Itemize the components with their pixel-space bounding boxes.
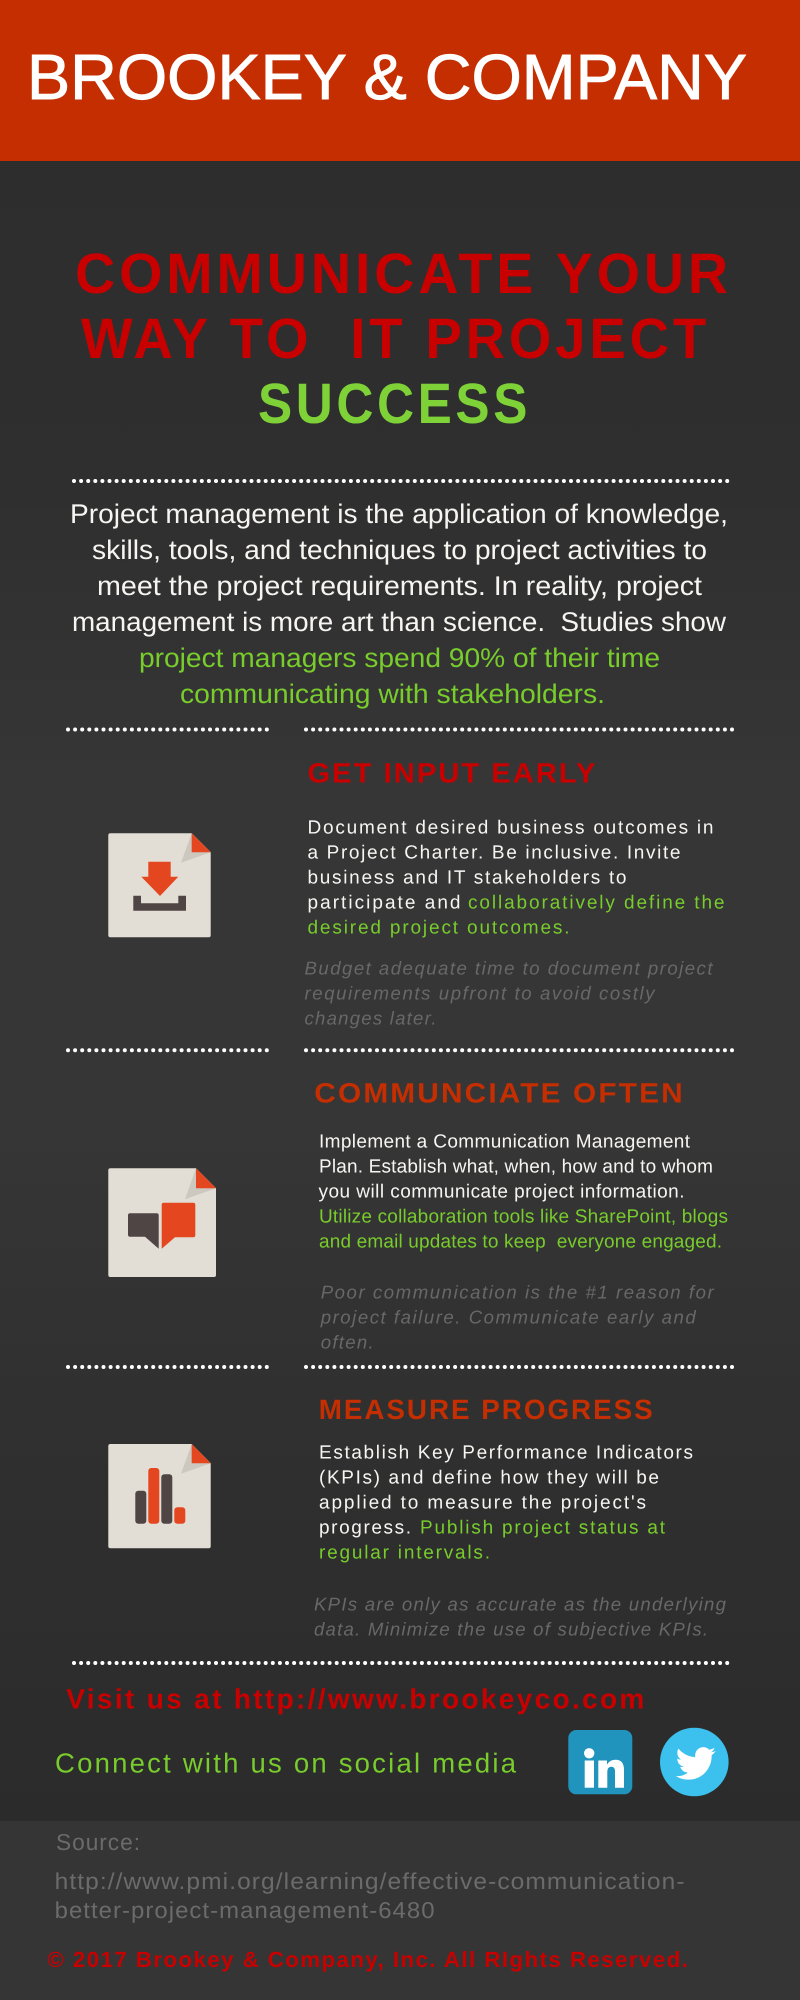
body text: Publish project status at bbox=[420, 1517, 666, 1538]
body text: and email updates to keep everyone engaged. bbox=[319, 1231, 722, 1252]
source url: http://www.pmi.org/learning/effective-communication- bbox=[55, 1868, 686, 1894]
body text: business and IT stakeholders to bbox=[308, 867, 626, 888]
heading: COMMUNCIATE OFTEN bbox=[314, 1078, 685, 1109]
intro paragraph: skills, tools, and techniques to project activities to bbox=[92, 535, 707, 565]
section: get input early bbox=[108, 758, 725, 1028]
main title: SUCCESS bbox=[258, 372, 531, 436]
body text: desired project outcomes. bbox=[308, 917, 570, 938]
heading: MEASURE PROGRESS bbox=[319, 1394, 655, 1425]
heading: GET INPUT EARLY bbox=[308, 758, 598, 789]
icon: twitter bbox=[660, 1728, 729, 1796]
intro paragraph: Project management is the application of knowledge, bbox=[70, 499, 728, 529]
body text: Establish Key Performance Indicators bbox=[319, 1442, 693, 1463]
body text: Utilize collaboration tools like SharePoint, blogs bbox=[319, 1206, 728, 1227]
section: communicate often bbox=[108, 1078, 728, 1352]
italic note bbox=[304, 957, 713, 1028]
italic note: often. bbox=[321, 1331, 374, 1352]
body text: Implement a Communication Management bbox=[319, 1131, 691, 1152]
icon: document bar chart bbox=[108, 1444, 211, 1548]
body text bbox=[318, 1131, 728, 1252]
source label: Source: bbox=[56, 1829, 141, 1855]
body text: Plan. Establish what, when, how and to whom bbox=[319, 1156, 713, 1177]
body text: participate and bbox=[308, 892, 460, 913]
italic note: changes later. bbox=[304, 1007, 436, 1028]
body text: a Project Charter. Be inclusive. Invite bbox=[308, 842, 680, 863]
italic note bbox=[314, 1594, 727, 1640]
body text: (KPIs) and define how they will be bbox=[319, 1467, 659, 1488]
body text: progress. bbox=[319, 1517, 411, 1538]
footer band bbox=[0, 1821, 800, 2000]
italic note: Budget adequate time to document project bbox=[304, 957, 713, 978]
company name: BROOKEY & COMPANY bbox=[27, 41, 747, 113]
body text: Document desired business outcomes in bbox=[308, 817, 714, 838]
body text bbox=[308, 817, 724, 938]
icon: document speech bubbles bbox=[108, 1168, 216, 1277]
source url: better-project-management-6480 bbox=[55, 1897, 436, 1923]
icon: document download bbox=[108, 833, 211, 937]
intro paragraph: meet the project requirements. In reality, project bbox=[97, 571, 703, 601]
italic note bbox=[320, 1281, 714, 1352]
website link: Visit us at http://www.brookeyco.com bbox=[66, 1683, 644, 1714]
main title: WAY TO IT PROJECT bbox=[81, 307, 710, 371]
source url bbox=[55, 1868, 686, 1923]
body text: applied to measure the project's bbox=[319, 1492, 646, 1513]
icon: linkedin bbox=[568, 1730, 632, 1794]
header banner bbox=[0, 0, 800, 161]
italic note: KPIs are only as accurate as the underlying bbox=[314, 1594, 727, 1615]
main title: COMMUNICATE YOUR bbox=[75, 242, 732, 306]
main title bbox=[75, 242, 732, 436]
intro paragraph: management is more art than science. Studies show bbox=[72, 607, 727, 637]
social media prompt: Connect with us on social media bbox=[55, 1747, 517, 1778]
section: measure progress bbox=[108, 1394, 727, 1640]
intro paragraph: project managers spend 90% of their time bbox=[139, 643, 660, 673]
italic note: Poor communication is the #1 reason for bbox=[321, 1281, 714, 1302]
intro paragraph: communicating with stakeholders. bbox=[180, 679, 605, 709]
body text bbox=[319, 1442, 693, 1563]
italic note: project failure. Communicate early and bbox=[320, 1306, 696, 1327]
italic note: requirements upfront to avoid costly bbox=[304, 982, 656, 1003]
italic note: data. Minimize the use of subjective KPIs. bbox=[314, 1619, 708, 1640]
body text: regular intervals. bbox=[319, 1542, 490, 1563]
body text: you will communicate project information. bbox=[318, 1181, 684, 1202]
intro paragraph bbox=[70, 499, 728, 709]
body text: collaboratively define the bbox=[468, 892, 724, 913]
copyright: © 2017 Brookey & Company, Inc. All RIghts Reserved. bbox=[47, 1947, 689, 1972]
